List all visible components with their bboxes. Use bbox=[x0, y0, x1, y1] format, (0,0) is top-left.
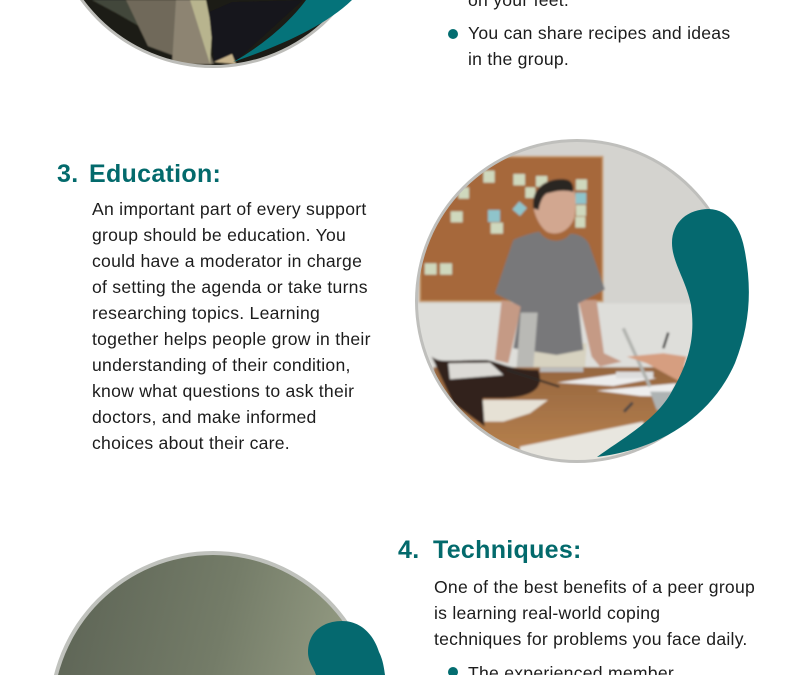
photo circle: woman at meeting table bbox=[415, 139, 749, 463]
table bbox=[432, 366, 684, 450]
text block: techniques paragraph: techniques for problems you face daily. bbox=[434, 629, 748, 649]
text block: education paragraph: choices about their care. bbox=[92, 433, 290, 453]
heading: 4. Techniques: Techniques: bbox=[433, 536, 582, 564]
text block: education paragraph: of setting the agenda or take turns bbox=[92, 277, 368, 297]
text block: education paragraph bbox=[92, 199, 371, 453]
tablet on table bbox=[517, 313, 538, 367]
text block: education paragraph: understanding of their condition, bbox=[92, 355, 351, 375]
teal swoosh: top photo bbox=[233, 0, 352, 62]
photo circle: bottom olive photo bbox=[49, 551, 385, 675]
heading: 4. Techniques: 4. bbox=[398, 536, 419, 564]
text block: techniques paragraph bbox=[434, 577, 755, 649]
text block: education paragraph: researching topics. Learning bbox=[92, 303, 320, 323]
teal swoosh: woman photo bbox=[597, 209, 749, 457]
text block: education paragraph: know what questions to ask their bbox=[92, 381, 354, 401]
cork board bbox=[420, 157, 603, 301]
woman bbox=[533, 179, 576, 234]
text block: techniques paragraph: One of the best benefits of a peer group bbox=[434, 577, 755, 597]
text block: education paragraph: could have a moderator in charge bbox=[92, 251, 362, 271]
bullet: share recipes: You can share recipes and ideas bbox=[468, 23, 730, 43]
heading: 3. Education: 3. bbox=[57, 160, 78, 188]
heading: 3. Education: Education: bbox=[89, 160, 221, 188]
text block: education paragraph: An important part of every support bbox=[92, 199, 366, 219]
text block: education paragraph: together helps people grow in their bbox=[92, 329, 371, 349]
text block: bullets, top right bbox=[448, 0, 730, 69]
bullet: share recipes bbox=[448, 23, 730, 69]
teal swoosh: bottom photo bbox=[308, 621, 385, 675]
photo circle: top group bbox=[80, 0, 352, 68]
text block: techniques paragraph: is learning real-world coping bbox=[434, 603, 660, 623]
text block: education paragraph: group should be education. You bbox=[92, 225, 346, 245]
bullet: share recipes: in the group. bbox=[468, 49, 569, 69]
text block: education paragraph: doctors, and make informed bbox=[92, 407, 317, 427]
